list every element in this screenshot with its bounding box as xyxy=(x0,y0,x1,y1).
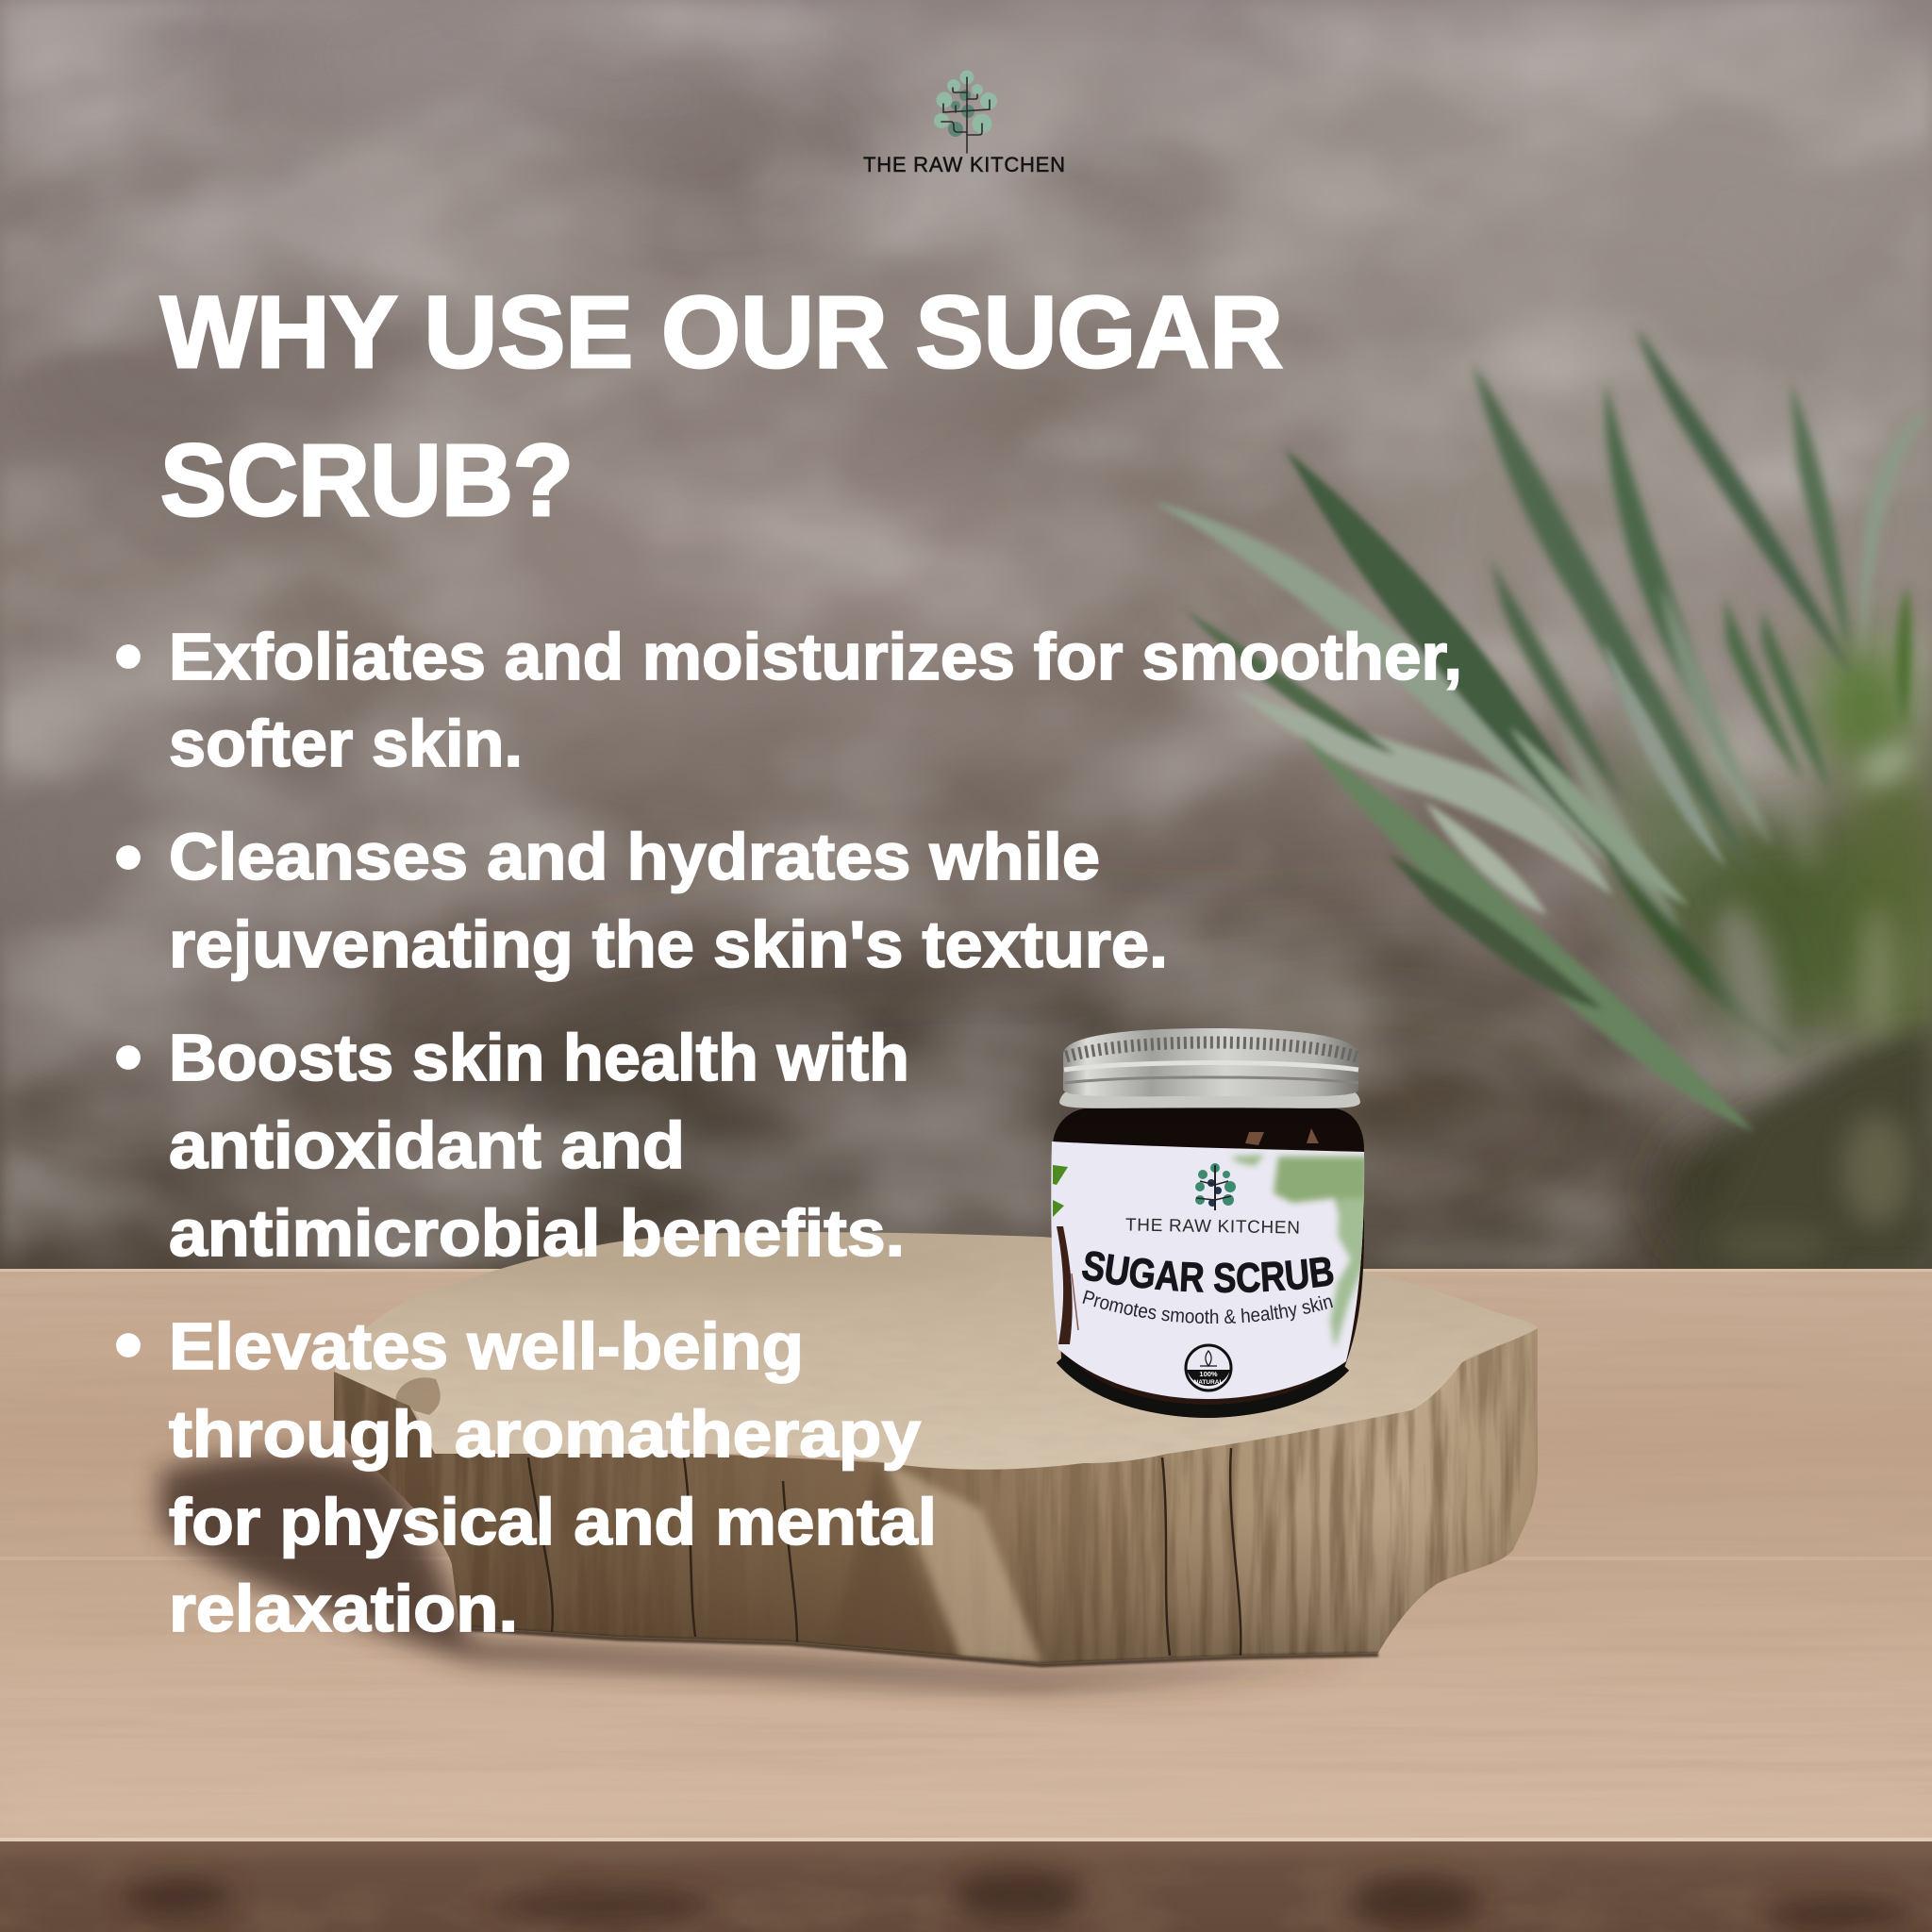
lid ridges xyxy=(1066,1042,1357,1057)
benefit 2 xyxy=(117,820,1168,981)
wooden slab xyxy=(160,1226,1547,1689)
label brand text: THE RAW KITCHEN xyxy=(1125,1215,1300,1239)
logo wordmark: THE RAW KITCHEN xyxy=(863,153,1065,176)
dark leaf xyxy=(1285,449,1623,873)
jar label xyxy=(1051,1141,1364,1399)
watercolor patch xyxy=(1231,1155,1368,1349)
label natural badge xyxy=(1186,1345,1231,1391)
plant: blurred green leaves xyxy=(1153,327,1932,1269)
slab top surface xyxy=(321,1226,1547,1481)
background: blurred stone wall xyxy=(0,0,1932,1283)
glass highlight xyxy=(1245,1128,1319,1145)
jar glass body xyxy=(1053,1108,1364,1418)
table front edge xyxy=(0,1838,1932,1932)
product jar xyxy=(1051,1028,1364,1418)
benefit 4 xyxy=(117,1309,937,1645)
label product name: SUGAR SCRUB xyxy=(1082,1251,1334,1293)
lid bottom ring xyxy=(1059,1085,1360,1108)
logo tree icon xyxy=(934,70,997,153)
benefit 3: antimicrobial benefits. xyxy=(169,1196,905,1270)
benefit 1 xyxy=(117,620,1462,780)
slab side xyxy=(321,1311,1547,1670)
benefit 4: for physical and mental xyxy=(169,1485,937,1558)
benefit 2: rejuvenating the skin's texture. xyxy=(169,908,1168,981)
benefit 3: antioxidant and xyxy=(169,1108,685,1182)
slab base line xyxy=(459,1628,1378,1665)
benefit 4: relaxation. xyxy=(169,1572,518,1645)
lid xyxy=(1063,1028,1358,1096)
benefits list xyxy=(117,620,1462,1645)
benefit 4: Elevates well-being xyxy=(169,1309,804,1383)
benefit 1: softer skin. xyxy=(169,707,523,780)
label natural badge: 100% xyxy=(1199,1370,1218,1378)
benefit 3: Boosts skin health with xyxy=(169,1021,909,1094)
benefit 2: Cleanses and hydrates while xyxy=(169,820,1100,893)
label botanical xyxy=(1057,1226,1073,1344)
pale leaf xyxy=(1234,690,1613,896)
plant base xyxy=(1668,1028,1932,1269)
long lower leaf xyxy=(1300,734,1755,1132)
slab shadow xyxy=(160,1452,1368,1689)
label natural badge: NATURAL xyxy=(1194,1379,1223,1386)
benefit 3 xyxy=(117,1021,909,1270)
benefit 4: through aromatherapy xyxy=(169,1397,921,1471)
light leaf xyxy=(1153,502,1608,863)
benefit 1: Exfoliates and moisturizes for smoother, xyxy=(169,620,1462,693)
table top xyxy=(0,1269,1932,1840)
label tree icon xyxy=(1195,1163,1236,1210)
label tagline: Promotes smooth & healthy skin xyxy=(1083,1291,1333,1324)
logo: The Raw Kitchen xyxy=(863,70,1065,176)
title xyxy=(160,275,1283,537)
title: WHY USE OUR SUGAR xyxy=(160,275,1283,389)
title: SCRUB? xyxy=(160,423,574,537)
